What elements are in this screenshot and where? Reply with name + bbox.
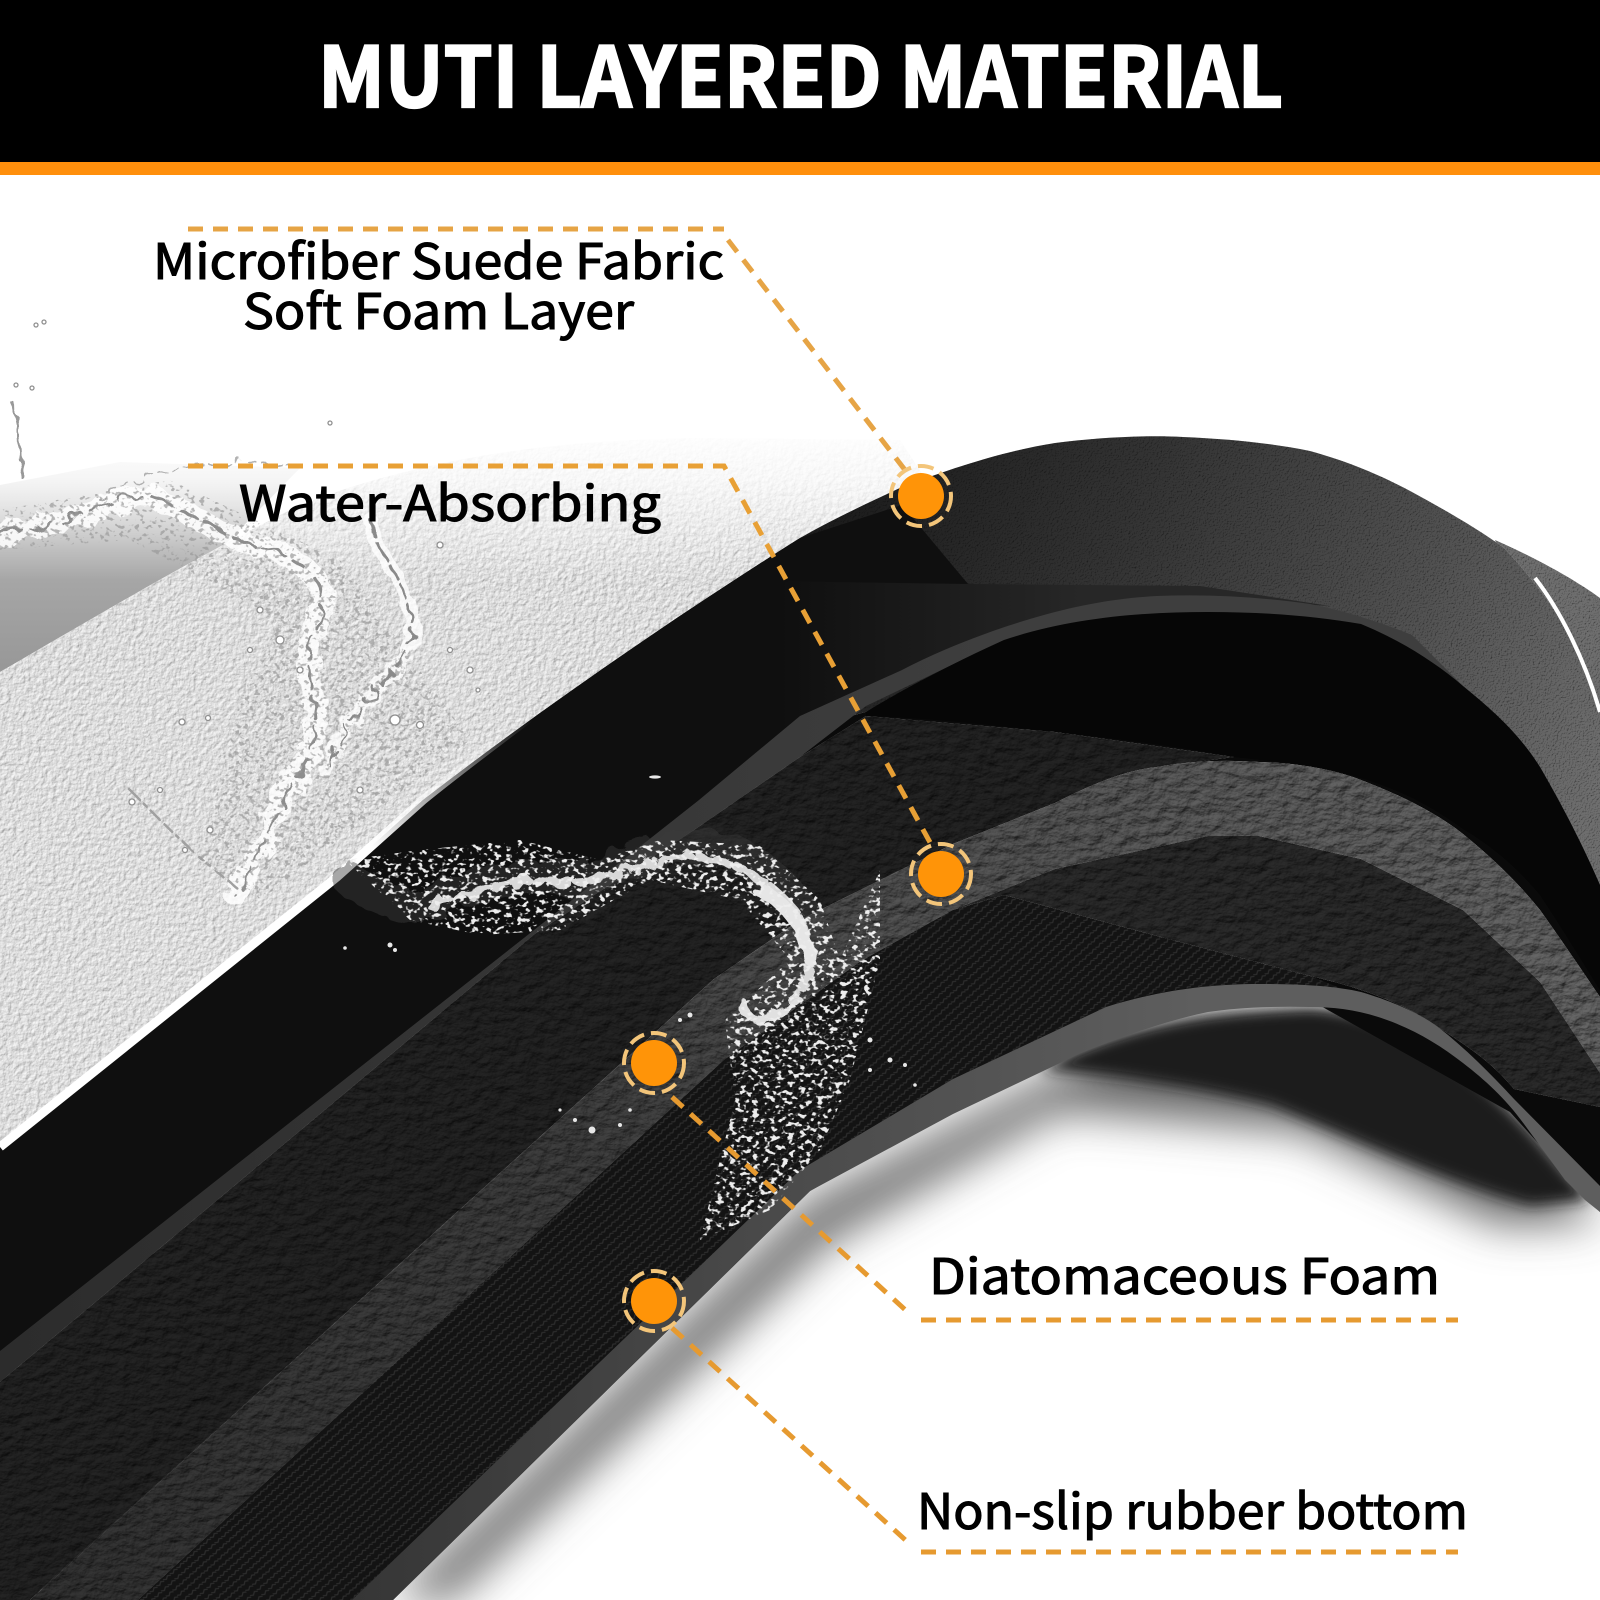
leader line 2 — [188, 466, 932, 846]
dark backing of the mat — [0, 437, 1600, 1600]
main dark-side water stream — [350, 845, 815, 1019]
orange header rule — [0, 162, 1600, 175]
label text 3: Diatomaceous Foam — [929, 1238, 1440, 1309]
callout: diatomaceous foam — [624, 1033, 1458, 1320]
header bar — [0, 0, 1600, 163]
water droplets — [343, 775, 917, 1134]
dark textured foam layer — [0, 716, 1234, 1600]
fabric surface layer — [0, 438, 930, 1147]
fabric top fade — [0, 420, 1000, 580]
label text 2: Water-Absorbing — [239, 465, 661, 536]
underside of bottom layer — [1040, 1007, 1590, 1205]
product: layered mat cross-section — [0, 420, 1600, 1600]
leader line 4 — [672, 1328, 1458, 1552]
top layer dome, microfiber suede back — [800, 436, 1600, 900]
label text 1: Microfiber Suede Fabric — [153, 223, 724, 294]
speckled water band — [345, 840, 880, 1240]
leader line 1 — [188, 229, 905, 470]
white edge sliver — [1535, 578, 1600, 712]
far right mat segment — [1495, 540, 1600, 740]
title: MUTI LAYERED MATERIAL — [318, 11, 1283, 131]
leader line 3 — [672, 1097, 1458, 1320]
lighter side of top layer at the bend — [620, 581, 1330, 800]
water splash on light fabric — [0, 320, 480, 900]
marker dot 1 — [891, 466, 951, 526]
marker dot 4 — [624, 1271, 684, 1331]
diatomaceous foam band — [30, 761, 1600, 1600]
dark foam inner layer — [953, 836, 1600, 1107]
black gap between layers — [866, 612, 1600, 990]
label text 1: Soft Foam Layer — [243, 273, 635, 344]
marker dot 2 — [911, 844, 971, 904]
label text 4: Non-slip rubber bottom — [917, 1473, 1468, 1544]
mesh layer — [138, 836, 1438, 1600]
far mat segment, top left — [0, 462, 300, 680]
marker dot 3 — [624, 1033, 684, 1093]
black band, top layer side — [0, 505, 1030, 1351]
grey edge stripe under top layer — [0, 595, 1600, 1382]
water splash on dark layers — [343, 775, 917, 1240]
cast shadow under mat — [393, 1020, 1600, 1600]
callout: water-absorbing — [188, 465, 971, 904]
splash droplets — [14, 320, 480, 852]
splash speckle — [0, 480, 470, 900]
thin white fabric edge — [0, 710, 540, 1147]
splash streams — [0, 400, 413, 895]
label text 1 — [153, 223, 724, 344]
callout: non-slip rubber bottom — [624, 1271, 1468, 1552]
callout: microfiber suede fabric — [153, 223, 951, 526]
rubber bottom layer stripe — [352, 984, 1600, 1600]
